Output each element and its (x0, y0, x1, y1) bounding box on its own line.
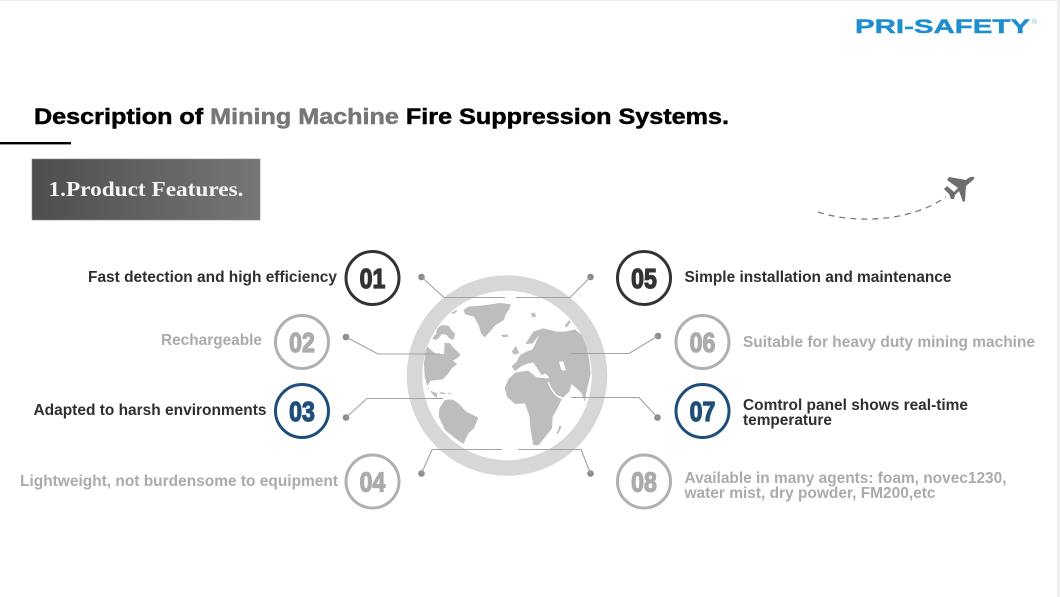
feature 03 (34, 384, 328, 438)
logo: PRI-SAFETY (855, 17, 1038, 38)
feature 02: Rechargeable (161, 332, 262, 349)
logo: PRI-SAFETY: PRI-SAFETY (855, 17, 1031, 38)
globe (414, 283, 600, 468)
feature 08: water mist, dry powder, FM200,etc (684, 485, 936, 502)
feature 05: 05 (631, 264, 657, 294)
feature 08: 08 (631, 468, 657, 498)
globe ring (414, 283, 600, 468)
continents (424, 303, 591, 445)
feature 07: Comtrol panel shows real-time (743, 397, 968, 414)
feature 01: Fast detection and high efficiency (88, 269, 337, 286)
feature 08 (618, 455, 1006, 508)
icon: airplane with dashed flight path (818, 177, 974, 219)
feature 06: Suitable for heavy duty mining machine (743, 334, 1035, 351)
feature 05 (618, 252, 952, 304)
feature 02: 02 (289, 328, 315, 358)
section heading: Product Features (32, 159, 260, 220)
feature 04: Lightweight, not burdensome to equipment (20, 473, 339, 490)
feature 01: 01 (360, 264, 385, 294)
feature 04: 04 (360, 468, 385, 498)
feature 02 (161, 316, 328, 368)
logo: PRI-SAFETY: ® (1032, 18, 1038, 26)
feature 04 (20, 455, 399, 508)
feature 06 (676, 316, 1035, 368)
connector lines and dots (343, 274, 661, 477)
title underline (0, 142, 71, 144)
feature 03: Adapted to harsh environments (34, 402, 267, 419)
feature 07: 07 (690, 397, 715, 427)
feature 06: 06 (690, 328, 715, 358)
feature 03: 03 (289, 397, 315, 427)
section heading: Product Features: 1.Product Features. (48, 177, 243, 201)
feature 08: Available in many agents: foam, novec1230, (684, 470, 1006, 487)
feature 07 (676, 384, 968, 438)
feature 05: Simple installation and maintenance (684, 269, 952, 286)
feature 07: temperature (743, 412, 832, 429)
feature 01 (88, 252, 399, 304)
title: Description of Mining Machine Fire Suppression Systems. (34, 104, 729, 129)
